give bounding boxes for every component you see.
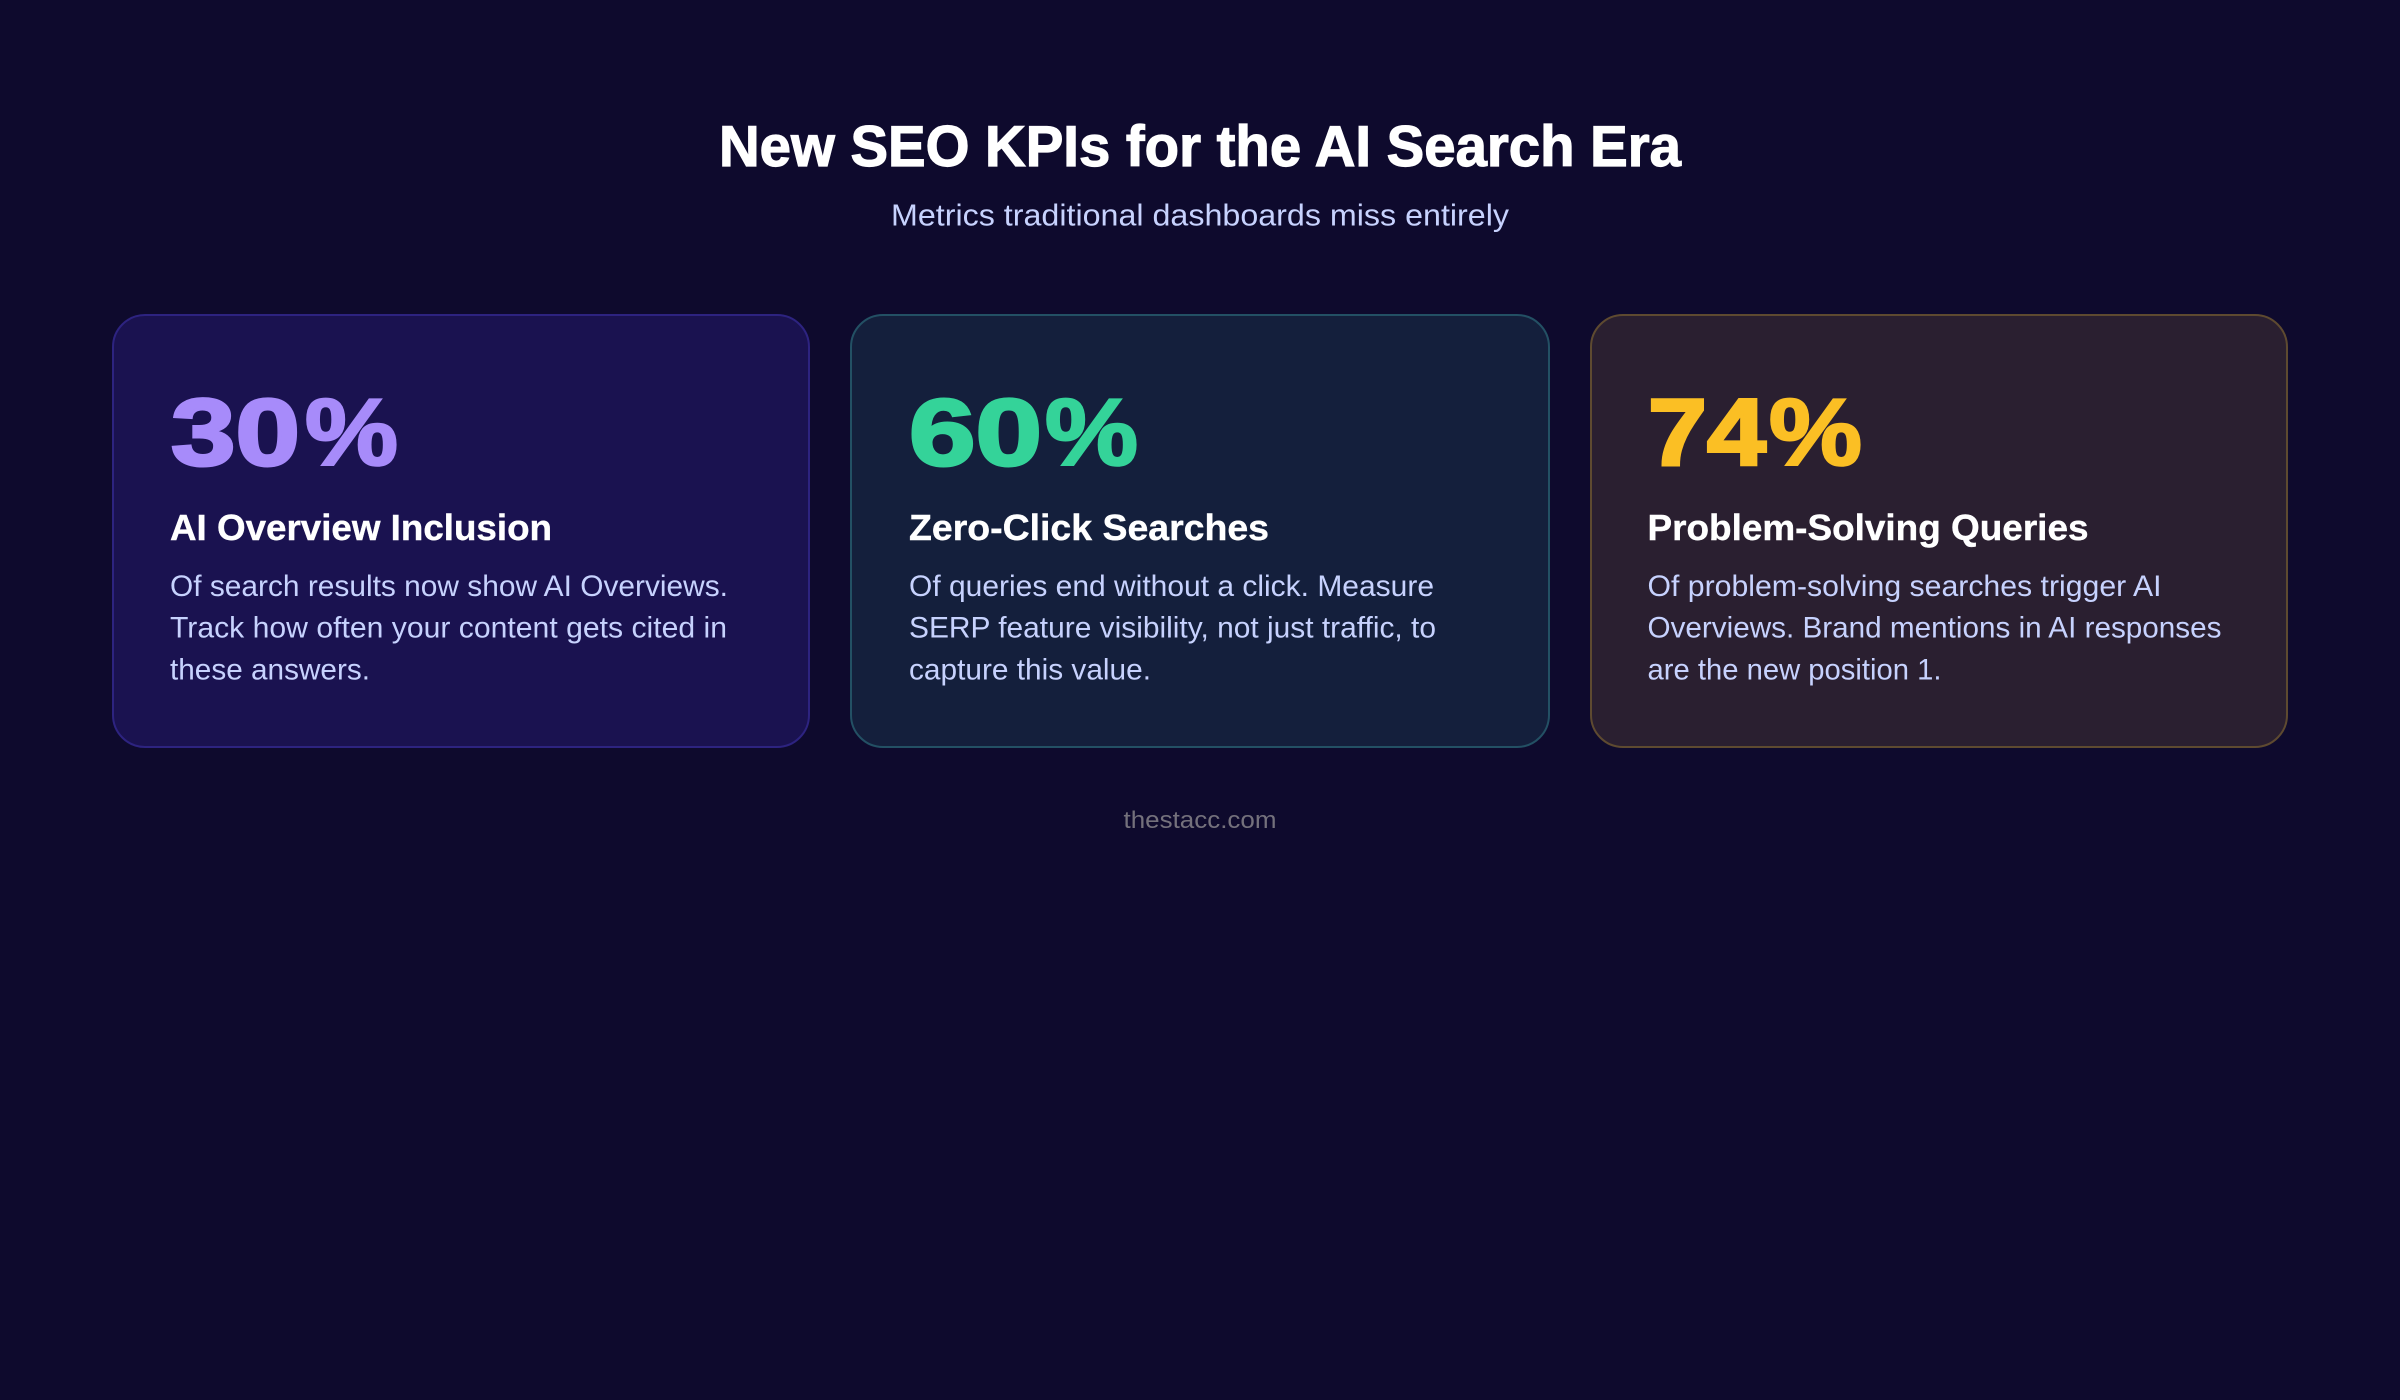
heading: Problem-Solving Queries: [1648, 507, 2088, 548]
panel: Zero-Click Searches: [851, 315, 1549, 747]
description: [909, 570, 1436, 686]
stat: 74%: [1648, 380, 1862, 486]
stat: 60%: 60: [909, 380, 1042, 486]
footer: thestacc.com: [1124, 807, 1276, 834]
description: capture this value.: [909, 654, 1151, 686]
panel: Problem-Solving Queries: [1591, 315, 2287, 747]
stat: 30%: %: [305, 380, 398, 486]
description: Of queries end without a click. Measure: [909, 570, 1434, 603]
description: Of search results now show AI Overviews.: [170, 570, 728, 603]
description: Overviews. Brand mentions in AI responses: [1648, 612, 2222, 644]
subtitle: Metrics traditional dashboards miss entirely: [891, 198, 1510, 232]
description: [1648, 570, 2222, 686]
stat: 74%: %: [1769, 380, 1862, 486]
description: [170, 570, 728, 686]
card background: [113, 315, 809, 747]
stat: 60%: %: [1045, 380, 1138, 486]
heading: AI Overview Inclusion: [170, 507, 552, 548]
stat: 30%: 30: [171, 380, 300, 486]
heading: Zero-Click Searches: [909, 507, 1269, 548]
description: Of problem-solving searches trigger AI: [1648, 570, 2162, 603]
title: New SEO KPIs for the AI Search Era: [719, 115, 1682, 179]
stat: 60%: [909, 380, 1138, 486]
description: these answers.: [170, 654, 370, 686]
panel: AI Overview Inclusion: [113, 315, 809, 747]
card background: [1591, 315, 2287, 747]
description: are the new position 1.: [1648, 654, 1942, 686]
card background: [851, 315, 1549, 747]
description: SERP feature visibility, not just traffic, to: [909, 612, 1436, 644]
stat: 74%: 74: [1648, 380, 1766, 486]
description: Track how often your content gets cited in: [170, 612, 727, 644]
stat: 30%: [171, 380, 398, 486]
